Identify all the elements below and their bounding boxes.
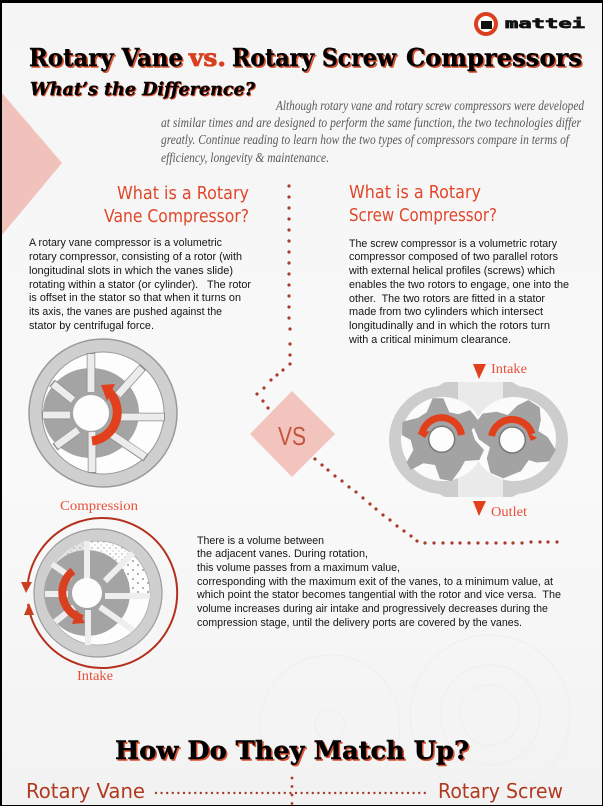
- text: volume explanation: volume increases during air intake and progressively decreases during the: [197, 603, 548, 615]
- diamond: VS: VS: [278, 421, 306, 451]
- text: rotary vane description: its axis, the vanes are pushed against the: [29, 306, 222, 318]
- decorative triangle: [2, 93, 62, 235]
- label: rotary screw column: Rotary Screw: [438, 779, 563, 803]
- dotted connector: [255, 184, 559, 545]
- heading: rotary vane: Vane Compressor?: [104, 206, 249, 227]
- diagram: rotary vane compressor: [29, 339, 177, 487]
- subtitle: What’s the Difference?: [30, 79, 255, 100]
- text: rotary vane description: stator by centrifugal force.: [29, 320, 154, 332]
- intro text: efficiency, longevity & maintenance.: [161, 150, 329, 165]
- heading: how do they match up: How Do They Match Up?: [115, 736, 469, 765]
- text: rotary vane description: is offset in the stator so that when it turns on: [29, 292, 241, 304]
- title: Rotary Vane: [29, 43, 183, 72]
- text: rotary vane description: longitudinal slots in which the vanes slide): [29, 265, 233, 277]
- label: rotary vane column: Rotary Vane: [26, 779, 145, 803]
- title: Rotary Vane: [30, 44, 184, 74]
- text: rotary vane description: A rotary vane compressor is a volumetric: [29, 237, 222, 249]
- diagram: rotary screw compressor: [389, 382, 568, 497]
- text: volume explanation: compression stage, until the delivery ports are covered by the vanes.: [197, 617, 522, 629]
- intro text: [161, 98, 584, 165]
- text: rotary screw description: The screw compressor is a volumetric rotary: [349, 238, 557, 250]
- text: volume explanation: There is a volume between: [197, 535, 324, 547]
- logo: mattei: [505, 17, 585, 32]
- label: compression: Compression: [60, 498, 138, 513]
- text: rotary vane description: [29, 237, 251, 332]
- subtitle: What’s the Difference?: [31, 80, 256, 101]
- text: rotary screw description: longitudinally and in which the rotors turn: [349, 320, 550, 332]
- text: rotary screw description: enables the two rotors to engage, one into the: [349, 279, 569, 291]
- label: screw intake: [473, 361, 527, 379]
- text: volume explanation: the adjacent vanes. During rotation,: [197, 548, 368, 560]
- title: [29, 43, 584, 74]
- label: screw outlet: [473, 501, 527, 519]
- title: Compressors: [408, 44, 584, 74]
- text: rotary screw description: with a critical minimum clearance.: [348, 334, 511, 346]
- title: vs.: [188, 43, 226, 72]
- diamond: VS: [250, 391, 335, 477]
- heading: rotary screw: [349, 182, 497, 226]
- heading: rotary screw: What is a Rotary: [349, 182, 481, 203]
- text: rotary screw description: other. The two rotors are fitted in a stator: [349, 293, 545, 305]
- diagram: vane compression cycle: [21, 518, 177, 668]
- text: rotary vane description: rotating within a stator (or cylinder). The rotor: [29, 279, 251, 291]
- heading: rotary vane: [104, 183, 249, 227]
- heading: rotary vane: What is a Rotary: [117, 183, 249, 204]
- title: Compressors: [406, 43, 582, 72]
- text: volume explanation: [196, 535, 561, 629]
- text: rotary screw description: [348, 238, 569, 346]
- heading: how do they match up: How Do They Match Up?: [116, 738, 470, 766]
- dotted comparison divider: [156, 778, 428, 804]
- text: rotary screw description: made from two cylinders which intersect: [349, 306, 544, 318]
- text: rotary vane description: rotary compressor, consisting of a rotor (with: [29, 251, 242, 263]
- text: rotary screw description: compressor composed of two parallel rotors: [349, 251, 558, 263]
- title: Rotary Screw: [232, 43, 397, 72]
- text: volume explanation: this volume passes from a maximum value,: [197, 562, 400, 574]
- label: screw intake: Intake: [491, 361, 527, 376]
- heading: rotary screw: Screw Compressor?: [349, 205, 497, 226]
- logo: [476, 14, 585, 34]
- text: rotary screw description: with external helical profiles (screws) which: [348, 265, 555, 277]
- label: intake: Intake: [77, 668, 113, 683]
- text: volume explanation: corresponding with the maximum exit of the vanes, to a minimum value, at: [197, 576, 554, 588]
- label: screw outlet: Outlet: [491, 504, 527, 519]
- title: Rotary Screw: [234, 44, 399, 74]
- text: volume explanation: which point the stator becomes tangential with the rotor and vice versa. The: [196, 589, 561, 601]
